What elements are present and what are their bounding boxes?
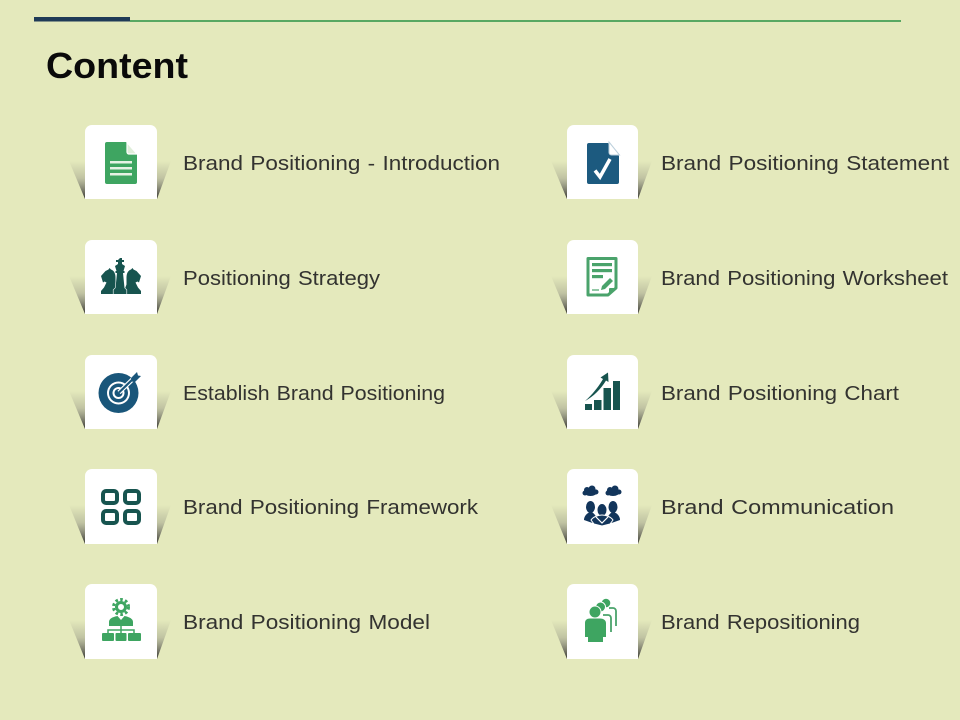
item: Brand Positioning Framework bbox=[69, 469, 479, 544]
item: Brand Positioning - Introduction bbox=[69, 125, 500, 199]
icon: document with check bbox=[587, 142, 620, 184]
item: Brand Repositioning bbox=[551, 584, 860, 659]
item: Brand Positioning Chart: Brand Positioning Chart bbox=[661, 382, 899, 405]
item: Brand Repositioning: Brand Repositioning bbox=[661, 611, 860, 634]
item: Brand Positioning Worksheet: Brand Positioning Worksheet bbox=[661, 267, 948, 290]
icon: rising bar chart bbox=[585, 372, 620, 410]
item: Positioning Strategy bbox=[69, 240, 381, 314]
item: Establish Brand Positioning bbox=[69, 355, 445, 429]
icon: manager hierarchy bbox=[102, 600, 141, 641]
item: Brand Positioning - Introduction: Brand Positioning - Introduction bbox=[183, 152, 500, 175]
icon: people in a queue bbox=[585, 598, 616, 642]
icon: chess pieces bbox=[101, 258, 141, 294]
icon: worksheet with pen bbox=[588, 258, 616, 295]
item: Brand Positioning Statement: Brand Positioning Statement bbox=[661, 152, 949, 175]
title: Content bbox=[46, 45, 188, 86]
item: Brand Communication bbox=[551, 469, 894, 544]
item: Brand Positioning Statement bbox=[551, 125, 949, 199]
item: Brand Positioning Chart bbox=[551, 355, 899, 429]
item: Brand Positioning Worksheet bbox=[551, 240, 948, 314]
icon: target with arrow bbox=[98, 372, 141, 413]
header rule bbox=[34, 17, 901, 22]
item: Brand Positioning Model: Brand Positioning Model bbox=[183, 611, 430, 634]
icon: document bbox=[105, 142, 137, 184]
item: Positioning Strategy: Positioning Strategy bbox=[183, 267, 381, 290]
item: Brand Positioning Model bbox=[69, 584, 430, 659]
icon: four squares bbox=[103, 491, 139, 523]
item: Establish Brand Positioning: Establish Brand Positioning bbox=[183, 382, 445, 405]
icon: team with thought clouds bbox=[582, 486, 622, 526]
item: Brand Communication: Brand Communication bbox=[661, 496, 894, 519]
item: Brand Positioning Framework: Brand Positioning Framework bbox=[183, 496, 479, 519]
